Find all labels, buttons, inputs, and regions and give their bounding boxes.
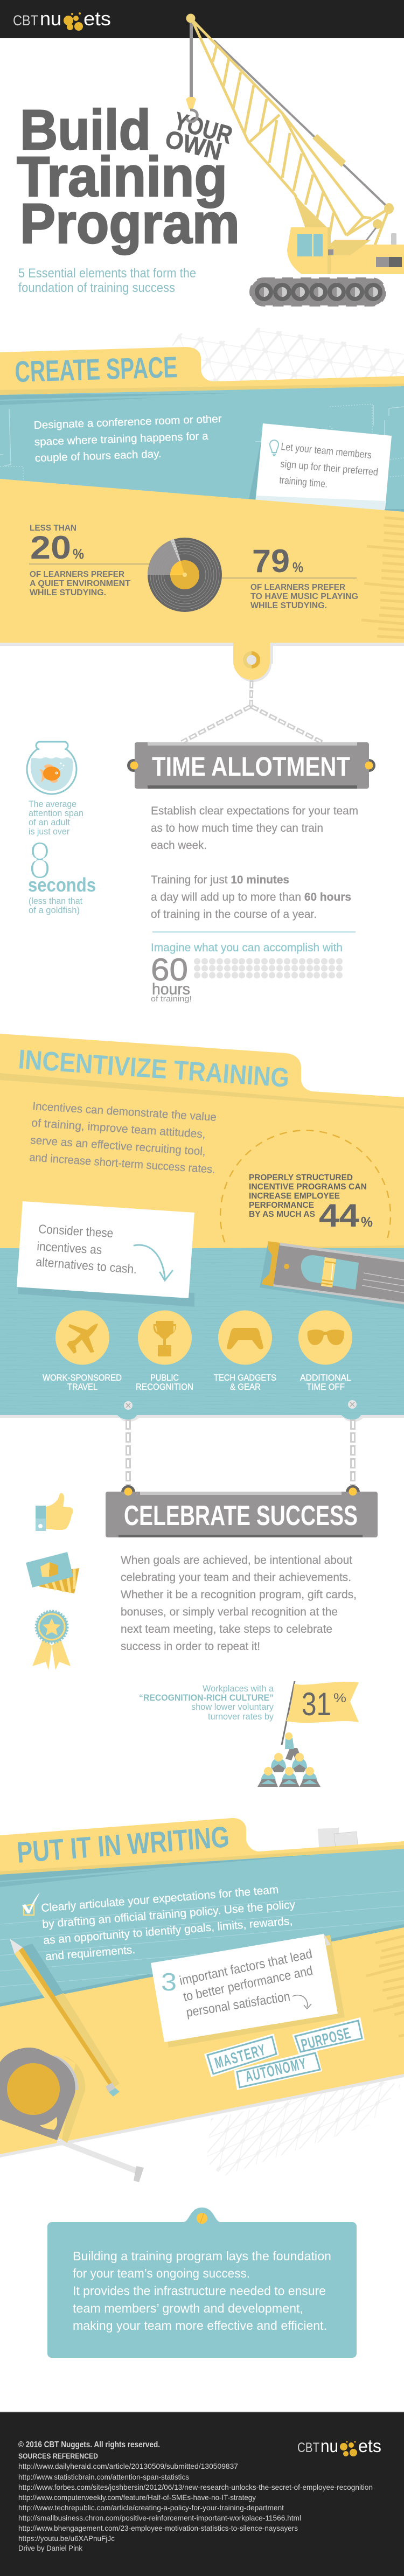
intro text: Clearly articulate your expectations for the team [41, 1883, 279, 1914]
goldfish stat: (less than that [29, 896, 82, 906]
title: Build [20, 99, 151, 162]
intro text: space where training happens for a [34, 430, 209, 448]
top lattice background [172, 328, 404, 384]
closing panel: Building a training program lays the foundation [73, 2249, 331, 2263]
stat: 79 percent music: WHILE STUDYING. [250, 601, 327, 610]
goldfish stat: of a goldfish) [29, 906, 80, 915]
incentive: recognition: PUBLIC [150, 1373, 179, 1383]
flag: 31 percent: 31 [302, 1686, 331, 1722]
celebrate body text: celebrating your team and their achievements. [121, 1571, 351, 1584]
icon: game controller [227, 1328, 263, 1349]
section heading: CREATE SPACE [15, 350, 178, 388]
celebrate body text: Whether it be a recognition program, gift cards, [121, 1589, 357, 1601]
note: three factors: personal satisfaction [185, 1989, 291, 2020]
icon: award ribbon [32, 1611, 71, 1670]
stat: 20 percent quiet: WHILE STUDYING. [30, 588, 106, 597]
intro text: couple of hours each day. [34, 448, 162, 464]
goldfish stat: of an adult [29, 818, 70, 827]
goldfish stat [27, 742, 96, 915]
incentive: gadgets: TECH GADGETS [214, 1373, 276, 1383]
goldfish stat: is just over [29, 827, 69, 837]
stamp: purpose: PURPOSE [299, 2024, 352, 2054]
intro text: Designate a conference room or other [33, 413, 222, 431]
sources: http://www.statisticbrain.com/attention-span-statistics [18, 2473, 189, 2481]
section heading: PUT IT IN WRITING [16, 1820, 231, 1869]
goldfish stat: seconds [28, 874, 96, 896]
title: Program [20, 192, 240, 255]
callout: 44 percent: INCENTIVE PROGRAMS CAN [249, 1182, 367, 1192]
intro text [41, 1883, 296, 1963]
stamp: purpose [292, 2017, 365, 2055]
boom lattice [192, 19, 389, 245]
notebook lines [0, 1891, 404, 1987]
note: consider these incentives: alternatives to cash. [36, 1255, 137, 1276]
paper tabs [318, 1828, 358, 1855]
stat: 79 percent music: % [292, 559, 303, 575]
recognition stat text: “RECOGNITION-RICH CULTURE” [139, 1693, 274, 1703]
crane cab and body [287, 227, 404, 274]
sources: http://www.dailyherald.com/article/20130509/submitted/130509837 [18, 2462, 238, 2470]
icon: spirit level [260, 1241, 404, 1309]
incentive: time off [298, 1310, 352, 1392]
tip note card: training time. [279, 475, 328, 490]
clipboard shadow band [0, 1924, 404, 2007]
sign: time allotment: TIME ALLOTMENT [152, 751, 350, 782]
flag: 31 percent: % [333, 1691, 346, 1705]
subtitle [18, 266, 196, 295]
hanging tab [233, 643, 273, 682]
panel: create space [0, 347, 404, 682]
callout: 44 percent: PERFORMANCE [249, 1201, 314, 1210]
note: consider these incentives [17, 1201, 194, 1307]
icon: sunglasses [308, 1329, 344, 1345]
incentive: time off: ADDITIONAL [300, 1373, 351, 1383]
chart: vinyl record pie [148, 538, 222, 612]
time allotment body text: Establish clear expectations for your team [151, 805, 358, 817]
arrow [292, 1995, 311, 2009]
note: three factors: 3 [161, 1968, 177, 1996]
stat: 20 percent quiet: A QUIET ENVIRONMENT [30, 579, 131, 588]
title: Training [17, 145, 227, 208]
sources: http://smallbusiness.chron.com/positive-reinforcement-important-workplace-11566.html [18, 2514, 301, 2522]
incentive: travel: WORK-SPONSORED [43, 1373, 122, 1383]
time allotment body text: a day will add up to more than 60 hours [151, 891, 351, 903]
section heading: INCENTIVIZE TRAINING [17, 1044, 290, 1093]
incentive: recognition: RECOGNITION [136, 1382, 193, 1392]
sources: http://www.bhengagement.com/23-employee-motivation-statistics-to-silence-naysayers [18, 2524, 298, 2532]
recognition stat text: Workplaces with a [203, 1684, 274, 1694]
stat: 79 percent music: TO HAVE MUSIC PLAYING [250, 592, 358, 601]
incentive: time off: TIME OFF [307, 1382, 345, 1392]
60 hours callout: of training! [151, 994, 192, 1004]
incentive: travel: TRAVEL [67, 1382, 97, 1392]
closing panel: team members’ growth and development, [73, 2301, 303, 2315]
tip note card [249, 423, 404, 514]
recognition stat text [139, 1684, 274, 1722]
folder tab and body [0, 1034, 404, 1250]
crane cable [214, 40, 386, 206]
yellow clipboard [0, 1927, 404, 2154]
sign: celebrate success [106, 1485, 378, 1537]
stamp: autonomy [234, 2050, 322, 2090]
blueprint lines [0, 404, 404, 479]
icon: people pyramid [257, 1732, 321, 1787]
stamp: mastery [204, 2034, 279, 2077]
sources: http://www.computerweekly.com/feature/Half-of-SMEs-have-no-IT-strategy [18, 2493, 256, 2502]
ruler ticks [361, 518, 404, 638]
incentive: gadgets: & GEAR [230, 1382, 261, 1392]
time allotment body text: each week. [151, 839, 207, 852]
intro text: and increase short-term success rates. [29, 1151, 215, 1176]
stamp: autonomy: AUTONOMY [243, 2055, 308, 2086]
celebrate body text: bonuses, or simply verbal recognition at the [121, 1606, 338, 1618]
teal page [0, 1849, 404, 2012]
hook rope [190, 19, 193, 98]
callout: 44 percent: % [361, 1214, 373, 1230]
teal paper [0, 386, 404, 514]
icon: light bulb [270, 440, 278, 456]
stat: 79 percent music: OF LEARNERS PREFER [250, 583, 345, 592]
closing panel: It provides the infrastructure needed to ensure [73, 2284, 326, 2298]
icon: goldfish bowl [27, 742, 76, 794]
panel: incentivize training [0, 1034, 404, 1422]
footer [0, 2412, 404, 2576]
intro text: of training, improve team attitudes, [31, 1117, 206, 1140]
time allotment body text: of training in the course of a year. [151, 908, 317, 921]
footer logo: ets [358, 2436, 381, 2456]
goldfish stat: 8 [29, 831, 51, 890]
note: three factors: important factors that lead [178, 1947, 314, 1988]
title: OWN [163, 124, 225, 165]
note: consider these incentives: incentives as [37, 1239, 102, 1257]
stat: 79 percent music: 79 [252, 543, 290, 579]
intro text [29, 1100, 217, 1176]
title: YOUR [171, 107, 235, 149]
logo: CBT [13, 12, 38, 29]
celebrate body text [121, 1554, 357, 1653]
footer logo: nu [321, 2436, 338, 2456]
60 hours callout: hours [152, 980, 190, 998]
chains: celebrate success [128, 1419, 353, 1487]
callout: 44 percent: 44 [319, 1198, 360, 1234]
sources: Drive by Daniel Pink [18, 2544, 83, 2552]
wood desk [0, 1248, 404, 1415]
goldfish stat: The average [29, 799, 76, 809]
time allotment body text [151, 805, 358, 921]
stat: 20 percent quiet: OF LEARNERS PREFER [30, 570, 124, 579]
closing panel: making your team more effective and efficient. [73, 2319, 327, 2333]
note: three factors: to better performance and [182, 1964, 314, 2004]
icon: thumbs up [36, 1493, 73, 1531]
sign: time allotment [127, 742, 375, 789]
incentive: travel [43, 1310, 122, 1392]
sources: © 2016 CBT Nuggets. All rights reserved. [18, 2440, 160, 2449]
crane hook [186, 97, 197, 122]
footer logo: CBT [297, 2440, 319, 2455]
title [17, 99, 240, 255]
icon: checkbox [22, 1892, 40, 1915]
tip note card: sign up for their preferred [280, 458, 379, 478]
icon: trophy [154, 1321, 176, 1356]
60 hours callout [151, 942, 343, 1004]
closing panel [47, 2208, 357, 2358]
intro text [33, 413, 222, 464]
folder tab [0, 347, 404, 409]
crane illustration [186, 14, 404, 305]
callout: 44 percent [220, 1130, 391, 1242]
note: consider these incentives: Consider these [38, 1222, 114, 1240]
flag: 31 percent [282, 1681, 359, 1745]
stat: 79 percent music [222, 543, 358, 610]
yellow pocket [0, 479, 404, 643]
desk tabs and screws [117, 1400, 365, 1422]
intro text: and requirements. [45, 1944, 136, 1963]
intro text: serve as an effective recruiting tool, [30, 1134, 206, 1158]
time allotment body text: as to how much time they can train [151, 822, 323, 834]
sources [18, 2440, 373, 2552]
stat: 20 percent quiet: % [73, 546, 84, 562]
recognition stat text: turnover rates by [208, 1712, 274, 1722]
incentive: recognition [136, 1310, 193, 1392]
celebrate body text: When goals are achieved, be intentional about [121, 1554, 352, 1567]
crane tracks [250, 279, 385, 305]
celebrate body text: next team meeting, take steps to celebrate [121, 1623, 332, 1635]
note: three factors [151, 1934, 345, 2048]
logo [13, 8, 111, 31]
intro text: as an opportunity to identify goals, limits, rewards, [43, 1915, 293, 1947]
chains: time allotment [182, 680, 322, 742]
60 hours callout: 60 [151, 952, 188, 987]
incentive: gadgets [214, 1310, 276, 1392]
logo: nu [40, 8, 61, 30]
recognition stat text: show lower voluntary [191, 1702, 274, 1712]
callout: 44 percent: BY AS MUCH AS [249, 1210, 315, 1219]
subtitle: foundation of training success [18, 281, 175, 295]
ruler ticks [366, 1936, 404, 2036]
bottom lattice background [206, 2080, 402, 2176]
icon: plane [67, 1324, 98, 1354]
goldfish stat: attention span [29, 809, 83, 818]
closing panel: for your team’s ongoing success. [73, 2266, 250, 2280]
intro text: by drafting an official training policy. Use the policy [42, 1898, 296, 1931]
stat: 20 percent quiet: 20 [30, 530, 71, 566]
icon: gift cards [26, 1552, 79, 1593]
header bar [0, 0, 404, 38]
intro text: Incentives can demonstrate the value [32, 1100, 217, 1124]
folder tab and page shadow [0, 2074, 404, 2157]
sources: https://youtu.be/u6XAPnuFjJc [18, 2534, 115, 2543]
sources: SOURCES REFERENCED [18, 2452, 98, 2460]
time allotment body text: Training for just 10 minutes [151, 874, 289, 886]
sources: http://www.forbes.com/sites/joshbersin/2012/06/13/new-research-unlocks-the-secret-of-employee-recognition [18, 2483, 373, 2491]
arrow [134, 1245, 172, 1280]
stamp: mastery: MASTERY [213, 2041, 267, 2072]
tip note card: Let your team members [281, 441, 372, 461]
stat: 20 percent quiet: LESS THAN [30, 524, 76, 533]
icon: tape measure [0, 2048, 144, 2182]
panel: put it in writing [0, 1818, 404, 2182]
subtitle: 5 Essential elements that form the [18, 266, 196, 281]
callout: 44 percent: PROPERLY STRUCTURED [249, 1173, 353, 1182]
sources: http://www.techrepublic.com/article/creating-a-policy-for-your-training-department [18, 2503, 284, 2512]
celebrate body text: success in order to repeat it! [121, 1640, 260, 1653]
icon: pencil [10, 1939, 120, 2097]
60 hours callout: Imagine what you can accomplish with [151, 942, 343, 954]
footer logo [297, 2436, 381, 2456]
chart: hour dots [194, 958, 343, 978]
callout: 44 percent: INCREASE EMPLOYEE [249, 1192, 340, 1201]
logo: ets [83, 8, 111, 30]
stat: 20 percent quiet [29, 524, 149, 597]
